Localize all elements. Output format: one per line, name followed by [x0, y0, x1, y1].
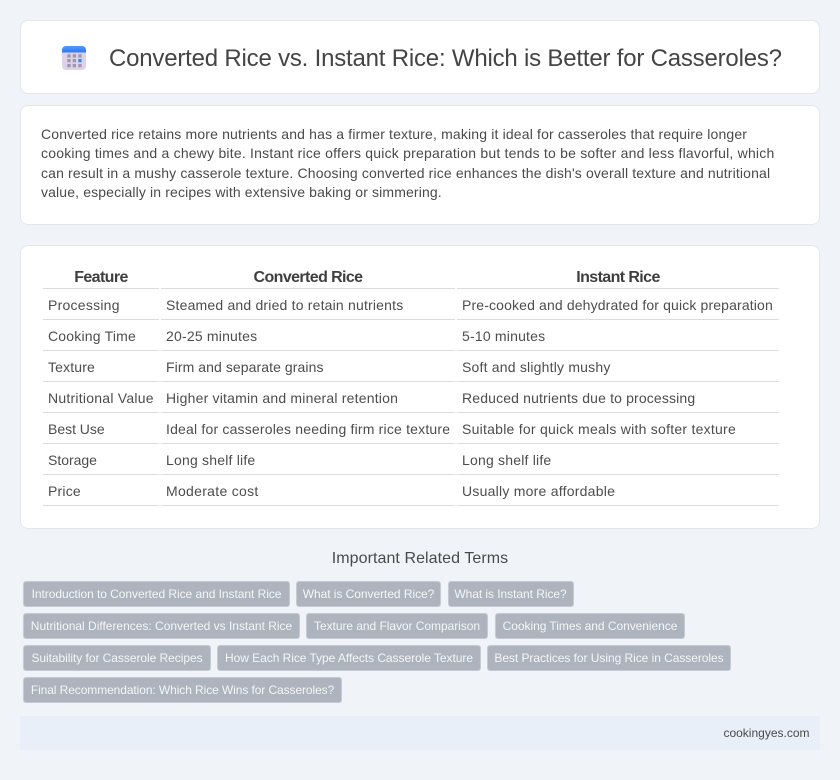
heading: related terms: Important Related Terms [332, 550, 508, 567]
panel: comparison table [20, 245, 820, 529]
row: nutritional value: Higher vitamin and mineral retention [166, 390, 398, 406]
row: price [48, 483, 615, 499]
row: best use: Best Use [48, 421, 105, 437]
row: processing [48, 297, 773, 313]
tag [448, 581, 574, 607]
footer [20, 716, 820, 750]
row: best use: Suitable for quick meals with softer texture [462, 421, 736, 437]
row: texture [48, 359, 611, 375]
footer credit: cookingyes.com [723, 726, 810, 740]
tag [23, 645, 211, 671]
tag [296, 581, 441, 607]
tag [23, 581, 290, 607]
tag: What is Instant Rice? [454, 587, 567, 601]
row: storage: Long shelf life [462, 452, 551, 468]
row: best use [48, 421, 736, 437]
table header: Feature [74, 269, 128, 286]
tag [495, 613, 685, 639]
tag list [23, 581, 731, 703]
row: storage [48, 452, 551, 468]
row: processing: Pre-cooked and dehydrated for quick preparation [462, 297, 773, 313]
row: best use: Ideal for casseroles needing firm rice texture [166, 421, 450, 437]
row: cooking time: Cooking Time [48, 328, 136, 344]
intro text: value, especially in recipes with extensive baking or simmering. [41, 184, 442, 200]
row: processing: Steamed and dried to retain nutrients [166, 297, 403, 313]
tag: Texture and Flavor Comparison [314, 619, 480, 633]
row: storage: Long shelf life [166, 452, 255, 468]
row: cooking time: 20-25 minutes [166, 328, 257, 344]
row: nutritional value: Reduced nutrients due to processing [462, 390, 695, 406]
tag [23, 613, 300, 639]
row: price: Moderate cost [166, 483, 259, 499]
table header: Instant Rice [576, 269, 660, 286]
tag [23, 677, 342, 703]
row: processing: Processing [48, 297, 120, 313]
row: texture: Firm and separate grains [166, 359, 324, 375]
tag: What is Converted Rice? [303, 587, 434, 601]
tag: Best Practices for Using Rice in Casseroles [494, 651, 724, 665]
icon: calendar [62, 46, 86, 70]
table header [74, 269, 660, 286]
intro text: Converted rice retains more nutrients and has a firmer texture, making it ideal for casseroles that require longer [41, 126, 747, 142]
row: cooking time: 5-10 minutes [462, 328, 545, 344]
panel: introduction [20, 105, 820, 225]
tag: Suitability for Casserole Recipes [31, 651, 203, 665]
tag [306, 613, 488, 639]
tag: Nutritional Differences: Converted vs Instant Rice [31, 619, 292, 633]
intro text: can result in a mushy casserole texture. Choosing converted rice enhances the dish's overall texture and nutritional [41, 165, 770, 181]
table header: Converted Rice [254, 269, 362, 286]
title: Converted Rice vs. Instant Rice: Which is Better for Casseroles? [109, 45, 782, 72]
tag: Final Recommendation: Which Rice Wins for Casseroles? [31, 683, 334, 697]
panel: header [20, 20, 820, 94]
intro text: cooking times and a chewy bite. Instant rice offers quick preparation but tends to be softer and less flavorful, which [41, 145, 774, 161]
row: nutritional value: Nutritional Value [48, 390, 154, 406]
intro text [41, 126, 774, 200]
row: texture: Texture [48, 359, 95, 375]
tag: Introduction to Converted Rice and Instant Rice [32, 587, 281, 601]
row: price: Price [48, 483, 81, 499]
tag: Cooking Times and Convenience [503, 619, 677, 633]
row: nutritional value [48, 390, 695, 406]
row: price: Usually more affordable [462, 483, 615, 499]
row: cooking time [48, 328, 545, 344]
row: texture: Soft and slightly mushy [462, 359, 611, 375]
tag [217, 645, 481, 671]
row: storage: Storage [48, 452, 97, 468]
tag [487, 645, 731, 671]
tag: How Each Rice Type Affects Casserole Texture [225, 651, 473, 665]
